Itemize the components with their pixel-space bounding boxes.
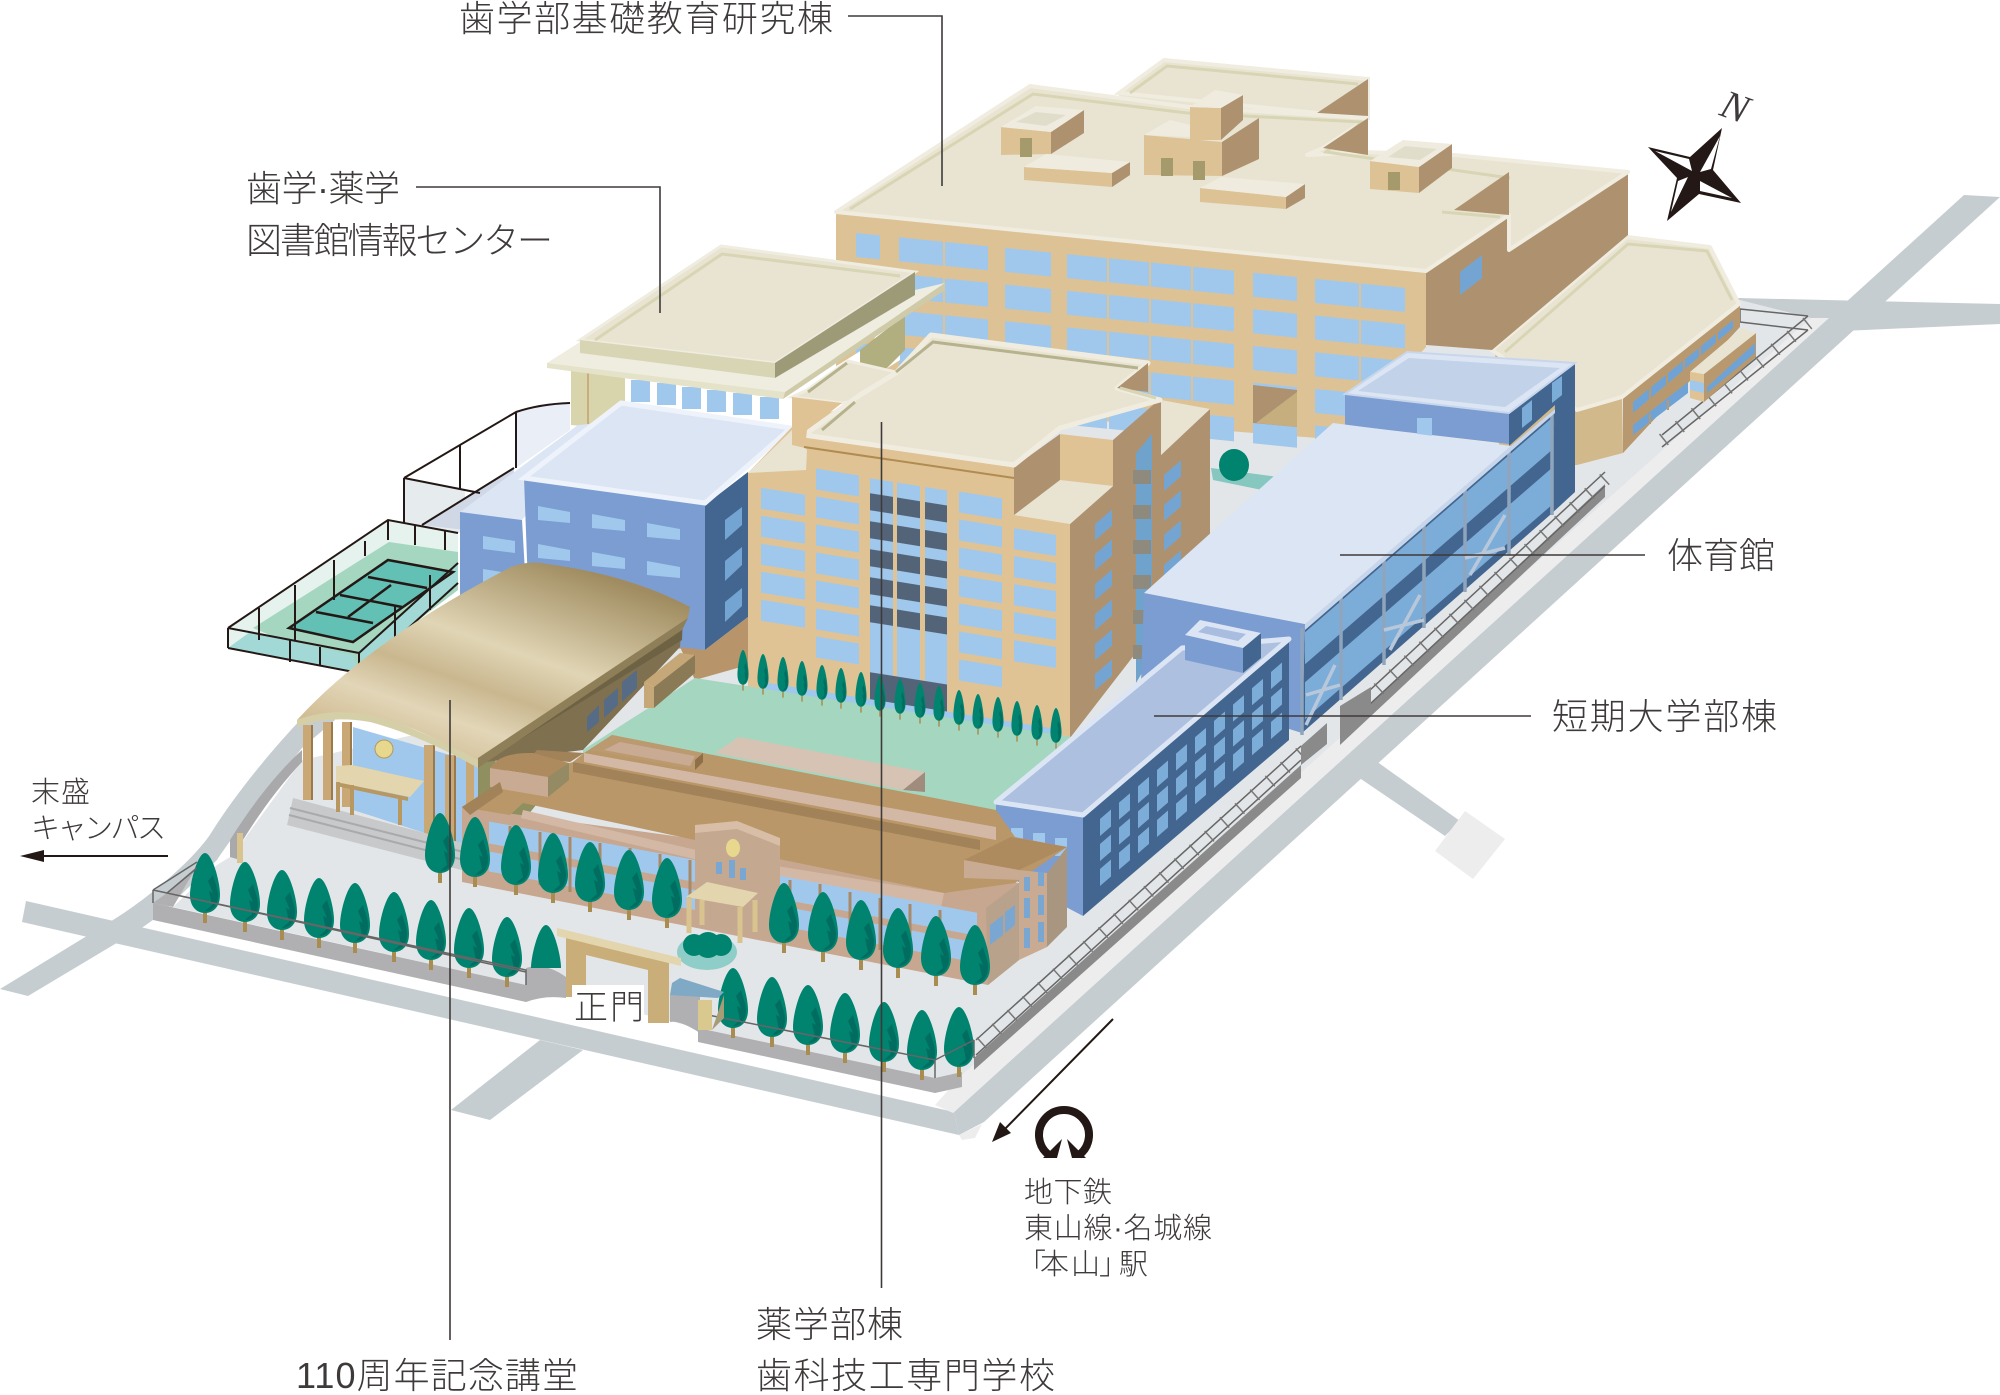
side annex	[644, 653, 695, 708]
label: subway: 東山線·名城線	[1024, 1212, 1212, 1245]
ground wall left	[153, 903, 526, 1002]
label: library information center	[246, 168, 553, 261]
perimeter fence rails front	[153, 862, 974, 1078]
tree clipped by gate	[531, 925, 561, 968]
building: far right tan arena	[1492, 237, 1756, 470]
compass	[1648, 80, 1758, 221]
roof	[297, 563, 690, 763]
label: Suemori campus: キャンパス	[31, 813, 166, 845]
left retaining curve and post	[153, 750, 302, 907]
compass: N	[1714, 80, 1758, 133]
auditorium	[287, 563, 695, 880]
left edge cornice	[462, 782, 503, 815]
guard house	[670, 978, 724, 1033]
gate side wall	[526, 966, 566, 1002]
rooftop box A	[1001, 106, 1084, 157]
label: subway	[1017, 1176, 1212, 1281]
tennis court with fence	[228, 403, 570, 673]
roads	[0, 195, 2000, 1135]
roof	[836, 86, 1628, 271]
steps	[287, 798, 500, 880]
windows	[489, 821, 977, 963]
trees: front-left row	[190, 853, 522, 987]
label: 正門: 正門	[574, 989, 644, 1027]
building: gymnasium	[1141, 352, 1575, 735]
fence gate blocks	[1301, 687, 1371, 765]
eave line	[804, 447, 1014, 478]
building: library information center	[547, 246, 945, 430]
rooftop box	[1185, 620, 1261, 673]
leader lines	[416, 16, 1645, 1340]
roof strip	[584, 753, 996, 840]
upper block	[1345, 352, 1575, 515]
rooftop box B	[1144, 118, 1259, 180]
brown ground	[680, 617, 748, 680]
roof	[462, 735, 1067, 893]
rooftop box E	[1200, 177, 1305, 209]
glass facade	[1302, 409, 1555, 735]
canopy	[336, 765, 424, 825]
left block	[490, 750, 584, 797]
front wall	[836, 212, 1426, 440]
arena windows	[1633, 320, 1733, 435]
row of small trees	[737, 650, 1062, 749]
rooftop box D	[1024, 154, 1130, 187]
small shrub	[677, 932, 737, 970]
label: pharmacy building	[756, 1304, 1055, 1395]
building: left blue block	[460, 403, 791, 660]
label: subway: 地下鉄	[1024, 1176, 1112, 1209]
roof inner lines	[850, 94, 1510, 209]
roof left annex	[792, 361, 896, 403]
side windows	[1095, 450, 1181, 690]
portico	[686, 882, 758, 943]
hall: courtyard strips	[715, 737, 925, 792]
label: pharmacy building: 歯科技工専門学校	[756, 1355, 1055, 1395]
back gable	[590, 735, 703, 770]
campus ground	[173, 300, 1811, 1078]
trees: in front of hall	[425, 813, 990, 995]
label: library information center: 歯学·薬学	[246, 168, 400, 209]
facade	[462, 807, 1019, 985]
windows	[856, 233, 1405, 458]
main gate	[557, 928, 681, 1023]
courtyard small tree	[1211, 449, 1278, 490]
arena annex	[1690, 328, 1756, 402]
label: 110th anniversary hall: 110周年記念講堂	[296, 1355, 578, 1395]
lawn	[583, 678, 1110, 835]
back net	[404, 403, 570, 533]
front windows	[761, 460, 1061, 743]
label: library information center: 図書館情報センター	[246, 220, 553, 261]
front wall	[1141, 593, 1305, 733]
label: Suemori campus: 末盛	[31, 776, 90, 809]
cornices	[521, 810, 944, 912]
label: gymnasium: 体育館	[1667, 535, 1775, 576]
side wall	[478, 623, 682, 763]
side window grid	[1100, 662, 1282, 886]
roof	[1144, 423, 1511, 624]
road light strips and plaza	[935, 318, 1829, 1140]
side stair strip	[1136, 434, 1152, 683]
right end	[964, 837, 1067, 985]
perimeter fence right	[974, 309, 1808, 1070]
roof	[804, 335, 1160, 465]
rear wing	[1119, 60, 1368, 226]
rooftop box F	[1370, 140, 1452, 193]
rooftop box C tower	[1190, 90, 1243, 140]
ground wall right	[698, 1028, 962, 1093]
label: subway: 「本山」駅	[1017, 1248, 1148, 1281]
arrow to subway	[992, 1019, 1113, 1142]
subway symbol	[1039, 1110, 1089, 1158]
label: pharmacy building: 薬学部棟	[756, 1304, 903, 1345]
hall: main old building	[462, 735, 1067, 985]
building: dental basic education research (main)	[836, 60, 1628, 458]
label: junior college: 短期大学部棟	[1552, 696, 1777, 737]
arrow to Suemori campus	[20, 850, 168, 862]
trees: front-right row	[718, 968, 974, 1080]
label: Suemori campus	[31, 776, 166, 845]
building: junior college	[996, 620, 1289, 916]
central pediment	[695, 821, 780, 940]
side wall	[1426, 172, 1628, 350]
entrance	[1253, 385, 1297, 427]
building: pharmacy / dental technician school	[748, 335, 1210, 743]
court ground	[228, 520, 458, 673]
